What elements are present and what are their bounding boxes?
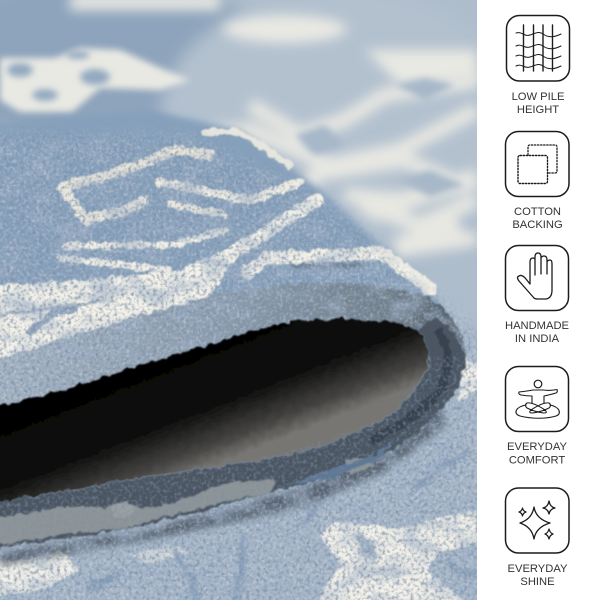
feature: handmade in india: [505, 246, 569, 345]
rug top face, in focus: [0, 110, 463, 370]
icon: raised hand: [506, 246, 568, 310]
icon: woven pile grid: [506, 16, 570, 81]
icon: fabric swatches: [506, 132, 569, 196]
label: everyday shine: [508, 563, 568, 588]
label: everyday comfort: EVERYDAY: [507, 441, 567, 453]
rolled rug lip: [0, 283, 466, 408]
feature: everyday shine: [506, 488, 569, 588]
feature column: [505, 16, 570, 588]
grey tufts on border: [0, 480, 275, 546]
label: handmade in india: IN INDIA: [515, 333, 560, 345]
rug floor below the roll: [0, 360, 477, 600]
border pile texture: [0, 352, 465, 546]
feature: low pile height: [506, 16, 570, 116]
label: low pile height: LOW PILE: [512, 91, 564, 103]
feature: cotton backing: [506, 132, 569, 231]
feature: everyday comfort: [506, 366, 568, 466]
label: everyday shine: EVERYDAY: [508, 563, 568, 575]
label: low pile height: [512, 91, 564, 116]
label: everyday comfort: COMFORT: [509, 454, 565, 466]
pile texture: [0, 130, 477, 600]
dark rug underside: [0, 319, 428, 504]
icon: meditating figure: [506, 366, 568, 432]
label: cotton backing: [512, 206, 563, 231]
icon: sparkles: [506, 488, 569, 553]
label: cotton backing: BACKING: [512, 219, 563, 231]
label: everyday comfort: [507, 441, 567, 466]
label: everyday shine: SHINE: [520, 576, 555, 588]
dark stitched border: [0, 318, 465, 549]
rug background, out of focus: [0, 0, 477, 498]
label: low pile height: HEIGHT: [517, 104, 559, 116]
label: handmade in india: [505, 320, 569, 345]
label: handmade in india: HANDMADE: [505, 320, 569, 332]
label: cotton backing: COTTON: [514, 206, 561, 218]
